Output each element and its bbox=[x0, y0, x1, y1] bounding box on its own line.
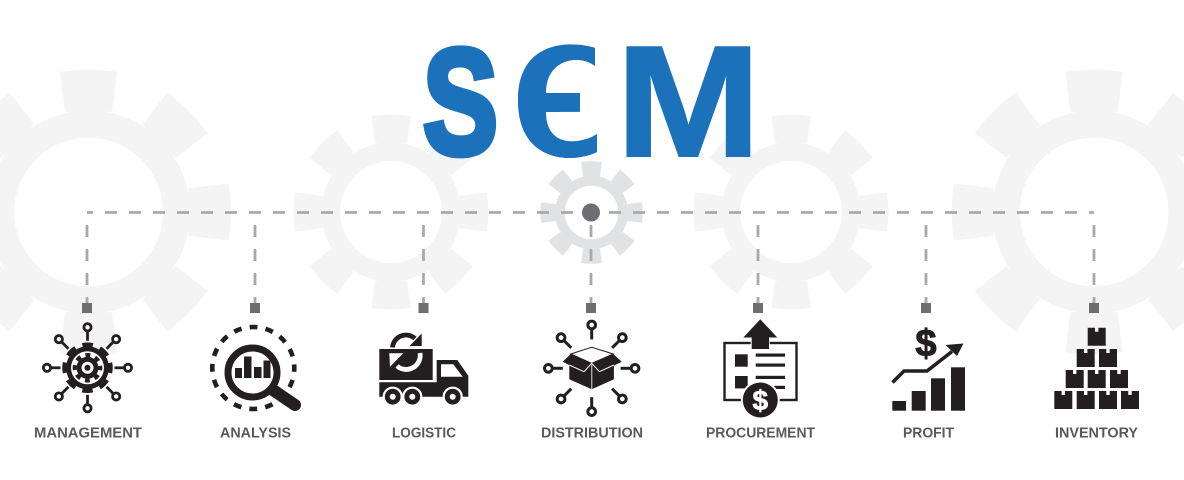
icon: procurement list bbox=[724, 319, 796, 420]
title: SEM: E bbox=[506, 12, 605, 192]
background gear: far right bbox=[952, 70, 1184, 354]
connector lines bbox=[87, 212, 1094, 303]
label: procurement: PROCUREMENT bbox=[706, 426, 815, 442]
label: management: MANAGEMENT bbox=[34, 426, 142, 442]
label: logistic: LOGISTIC bbox=[392, 426, 456, 442]
label: profit: PROFIT bbox=[903, 426, 954, 442]
background gear: mid right bbox=[693, 114, 889, 310]
icon: analysis magnifier bbox=[212, 327, 295, 409]
icon: distribution box bbox=[545, 321, 639, 415]
label: inventory: INVENTORY bbox=[1055, 426, 1138, 442]
connector end squares bbox=[82, 303, 1099, 313]
icon: profit chart bbox=[892, 323, 965, 411]
title: SEM bbox=[423, 44, 750, 158]
icon: procurement list: $ bbox=[753, 385, 769, 416]
icon: logistic truck bbox=[379, 334, 468, 406]
label: distribution: DISTRIBUTION bbox=[541, 426, 643, 442]
background gear: mid left bbox=[293, 114, 489, 310]
icon: profit chart: $ bbox=[915, 323, 937, 365]
label: analysis: ANALYSIS bbox=[220, 426, 291, 442]
icon: management gear bbox=[43, 324, 132, 412]
center gear bbox=[540, 161, 643, 264]
title: SEM: M bbox=[616, 14, 761, 190]
title: SEM: S bbox=[423, 19, 498, 186]
center hub dot bbox=[582, 204, 600, 222]
background gear: far left bbox=[0, 70, 231, 354]
icon: inventory boxes bbox=[1054, 328, 1139, 409]
